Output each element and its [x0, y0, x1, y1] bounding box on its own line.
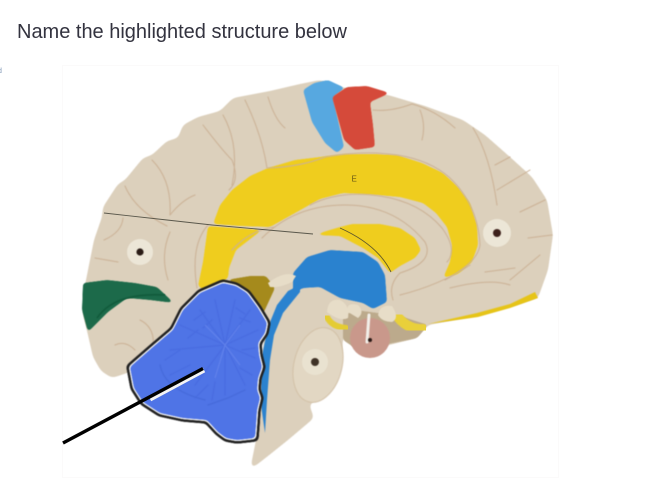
cerebellar folia	[160, 300, 258, 405]
inner yellow arc	[313, 224, 421, 273]
pointer line	[63, 368, 204, 443]
midbrain lobes	[327, 300, 396, 322]
letter E on model: E	[352, 174, 357, 184]
fornix lobes	[268, 274, 296, 287]
mounting hole: right	[483, 219, 511, 247]
ventricle blue	[293, 250, 387, 309]
gyri lines	[95, 97, 552, 360]
title: Name the highlighted structure below	[17, 21, 348, 43]
red cortex strip	[332, 86, 390, 150]
brain base shape	[83, 80, 553, 470]
pituitary	[350, 315, 390, 358]
yellow rim along frontal base	[428, 292, 538, 324]
ventricle tail	[261, 285, 300, 433]
cerebellar arbor highlight	[205, 325, 240, 378]
big yellow arc	[213, 154, 478, 278]
highlighted cerebellum	[130, 283, 267, 440]
cerebellum fill	[130, 283, 267, 440]
mounting hole: brainstem	[302, 349, 328, 375]
lower yellow wedge	[198, 226, 262, 292]
panel: brain model	[63, 80, 553, 470]
small yellow nerve	[327, 317, 346, 328]
section seam line	[104, 213, 391, 272]
blue cortex strip	[303, 80, 345, 153]
dark yellow wedge behind cerebellum	[226, 276, 275, 314]
optic nerve yellow	[397, 316, 423, 329]
photo frame	[62, 66, 558, 478]
mounting hole: left	[127, 239, 153, 265]
green cortex strip	[82, 280, 174, 332]
green strip inner shade	[97, 295, 165, 318]
brown shade behind pituitary	[343, 310, 428, 348]
pons oval	[286, 322, 350, 408]
